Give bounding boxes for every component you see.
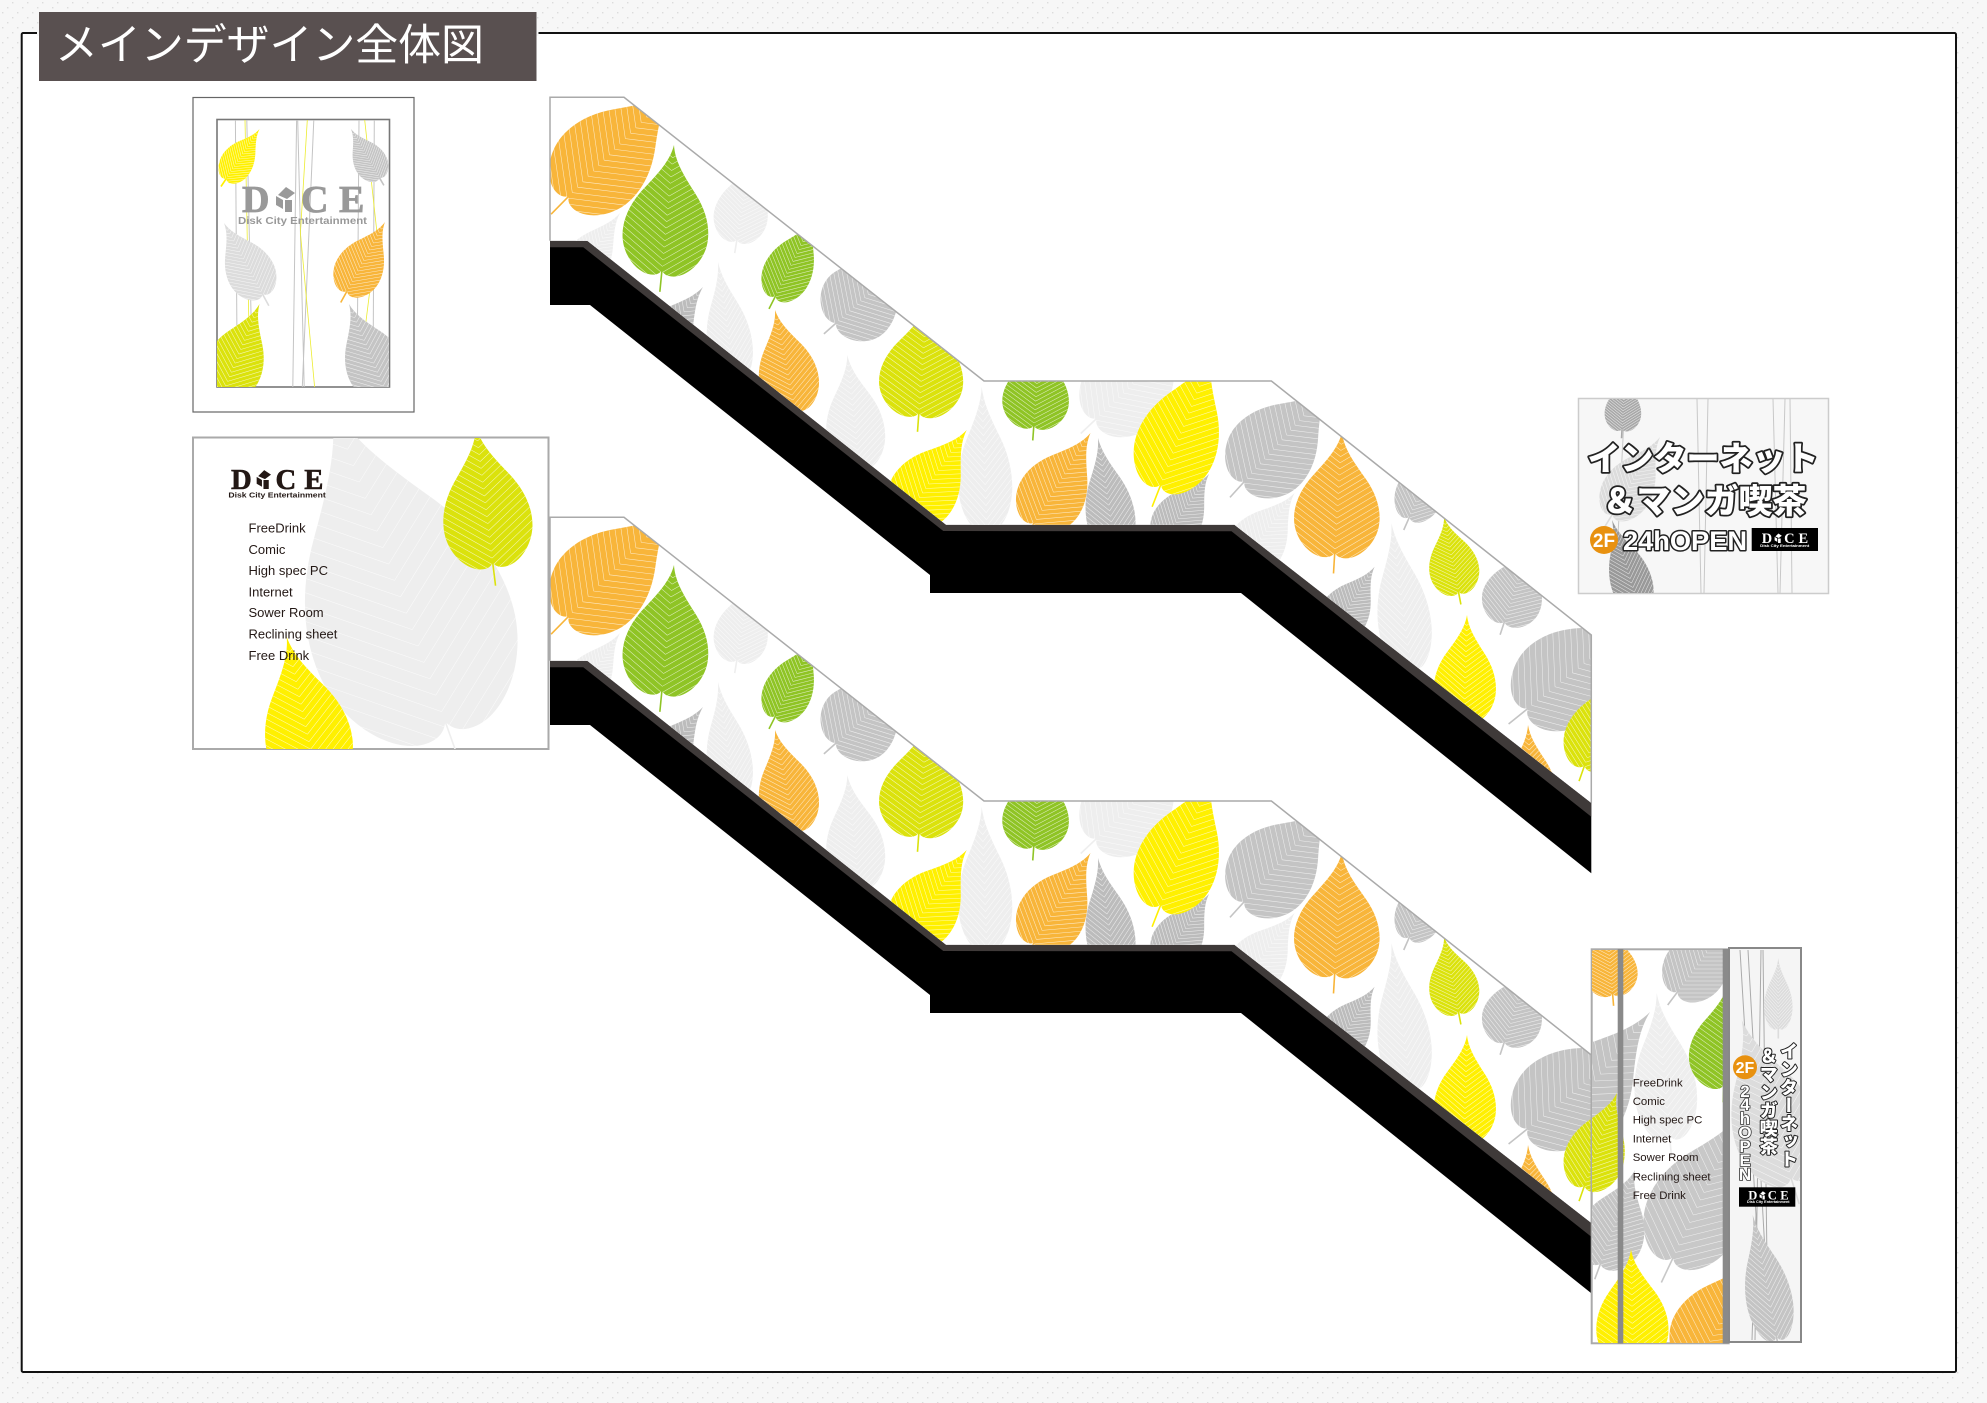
icon: gray leaf top	[1604, 399, 1642, 438]
text: 24hOPEN vertical: E	[1739, 1151, 1751, 1170]
logo: DICE gray: C	[301, 179, 328, 221]
icon: dark leaf bottom	[1609, 520, 1654, 593]
panel: pillar front with vertical text	[1728, 947, 1802, 1343]
logo: DICE dark: E	[304, 464, 323, 496]
text block: service list: FreeDrink	[1633, 1078, 1683, 1090]
icon: green leaf	[1688, 996, 1723, 1102]
leaf pattern	[509, 37, 1693, 846]
text block: service list: Comic	[1633, 1096, 1665, 1108]
icon: gray leaf bottom	[1745, 1216, 1794, 1341]
text block: service list: Internet	[248, 584, 293, 600]
logo: DICE on black box: Disk City Entertainment	[1747, 1200, 1791, 1204]
headline: internet: インターネット	[1588, 432, 1818, 480]
black stair stringer	[550, 241, 1591, 873]
band outline	[550, 97, 1591, 803]
headline: manga cafe: ＆マンガ喫茶	[1602, 474, 1806, 523]
badge: 2F: 2F	[1736, 1060, 1755, 1077]
logo: DICE gray	[238, 179, 368, 227]
gray stair edge	[550, 241, 1591, 817]
text block: service list: Sower Room	[1633, 1152, 1699, 1164]
text block: service list: Comic	[248, 542, 286, 557]
icon: gray leaf large	[1644, 1132, 1723, 1283]
logo: DICE on black box	[1739, 1187, 1795, 1207]
icon: gray leaf top right	[351, 129, 388, 186]
logo: DICE on black box: C	[1768, 1188, 1777, 1202]
icon: orange leaf top	[1592, 950, 1638, 1006]
panel: outlined signboard	[1578, 398, 1830, 594]
text: 24hOPEN vertical: h	[1740, 1109, 1750, 1128]
logo: DICE dark: C	[276, 464, 296, 496]
icon: yellow leaf	[1596, 1250, 1669, 1343]
logo: DICE gray: E	[339, 179, 364, 221]
icon: yellow-green leaf	[217, 304, 264, 387]
icon: pale gray leaf	[224, 224, 276, 306]
text block: service list: Internet	[1633, 1133, 1672, 1145]
logo: DICE dark	[228, 464, 326, 500]
text: 24hOPEN vertical: 2	[1740, 1082, 1750, 1101]
logo: DICE on black box: E	[1780, 1188, 1789, 1202]
icon: big pale leaf	[305, 438, 518, 749]
icon: orange leaf bottom	[1669, 1278, 1723, 1343]
icon: yellow leaf	[218, 129, 260, 187]
icon: yellow-green leaf	[443, 438, 532, 586]
badge: 2F	[1590, 526, 1618, 554]
text block: service list	[1633, 1078, 1711, 1202]
icon: yellow-green leaf	[1592, 1093, 1625, 1192]
icon: gray leaf left lower	[1592, 1170, 1644, 1280]
icon: gray leaf middle	[1732, 1020, 1800, 1204]
logo: DICE dark: Disk City Entertainment	[228, 491, 326, 500]
icon: gray leaf bottom right	[345, 304, 389, 387]
icon: pale slim leaf	[1634, 994, 1697, 1158]
panel: pillar side with service list	[1590, 948, 1730, 1344]
headline: internet vertical: インターネット	[1776, 1042, 1802, 1168]
text: 24hOPEN vertical: O	[1738, 1123, 1752, 1142]
icon: orange leaf	[333, 222, 385, 303]
text block: service list: Free Drink	[1633, 1190, 1686, 1202]
logo: DICE on black box: C	[1784, 531, 1795, 547]
title bar: メインデザイン全体図	[55, 11, 484, 73]
text block: service list	[248, 520, 338, 663]
logo: DICE gray: Disk City Entertainment	[238, 216, 368, 227]
badge: 2F	[1733, 1055, 1757, 1079]
panel: wall sign with service list	[192, 436, 550, 750]
text block: service list: Reclining sheet	[1633, 1171, 1711, 1183]
panel: upper staircase wall band	[509, 37, 1693, 873]
logo: DICE dark: D	[231, 464, 252, 496]
text block: service list: Reclining sheet	[248, 626, 338, 642]
text: 24hOPEN vertical: 4	[1740, 1095, 1750, 1114]
text block: service list: High spec PC	[1633, 1115, 1702, 1127]
text block: service list: Sower Room	[248, 605, 324, 620]
panel: vertical poster with DICE logo	[185, 98, 424, 425]
logo: DICE on black box: E	[1799, 531, 1808, 547]
text block: service list: High spec PC	[248, 563, 328, 578]
text: 24hOPEN: 24hOPEN	[1623, 526, 1747, 556]
text block: service list: FreeDrink	[248, 520, 306, 536]
logo: DICE on black box: D	[1748, 1188, 1757, 1202]
logo: DICE on black box: D	[1762, 531, 1772, 547]
headline: manga cafe vertical: ＆マンガ喫茶	[1756, 1047, 1782, 1155]
text: 24hOPEN vertical	[1738, 1082, 1752, 1184]
logo: DICE on black box: Disk City Entertainment	[1760, 544, 1810, 548]
text: 24hOPEN vertical: N	[1739, 1165, 1751, 1184]
panel: lower staircase wall band	[509, 457, 1693, 1293]
icon: pale leaf top	[1764, 958, 1792, 1038]
badge: 2F: 2F	[1593, 531, 1615, 552]
text block: service list: Free Drink	[248, 648, 310, 663]
icon: pale leaf	[1600, 438, 1660, 526]
icon: gray leaf top	[1662, 950, 1723, 1006]
icon: gray leaf left	[1592, 1012, 1650, 1118]
logo: DICE gray: D	[242, 179, 269, 221]
logo: DICE on black box	[1752, 528, 1818, 551]
icon: yellow leaf	[265, 637, 353, 749]
text: 24hOPEN vertical: P	[1739, 1137, 1751, 1156]
